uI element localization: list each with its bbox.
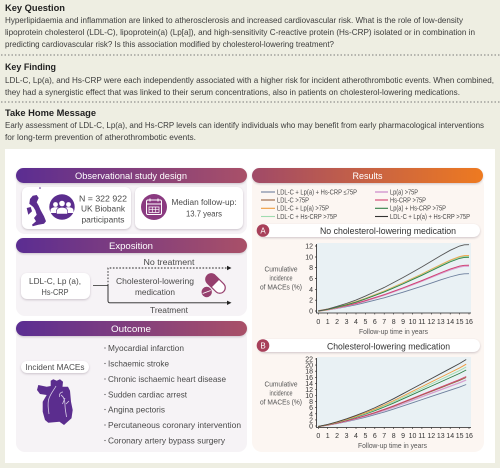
arrow: treatment <box>108 286 232 315</box>
legend <box>261 189 470 221</box>
text block: key question: predicting cardiovascular risk? Is this association modified by cholesterol-lowering treatment? <box>5 39 334 49</box>
text: participants: N = 322 922 <box>79 194 127 204</box>
chart B: cumulative incidence: 4 <box>354 433 358 440</box>
chart B: cumulative incidence: Follow-up time in years <box>358 441 427 450</box>
heading: B cholesterol-lowering medication: Cholesterol-lowering medication <box>327 342 450 352</box>
text: median follow-up: 13.7 years <box>186 208 222 218</box>
chart B: cumulative incidence: 14 <box>305 381 313 388</box>
y axis label B: Cumulative <box>264 380 298 388</box>
list: MACE outcomes <box>104 343 241 446</box>
chart B: cumulative incidence: 11 <box>418 433 426 440</box>
legend: Lp(a) + Hs-CRP >75P <box>390 206 446 213</box>
list: MACE outcomes: Sudden cardiac arrest <box>108 390 188 400</box>
chart A: cumulative incidence: 4 <box>354 319 358 326</box>
chart A: cumulative incidence: 11 <box>418 319 426 326</box>
text: median follow-up: Median follow-up: <box>172 197 236 207</box>
legend: LDL-C >75P <box>277 198 309 204</box>
arrow: no treatment: No treatment <box>144 257 195 267</box>
icon: UK map <box>27 187 46 226</box>
chart A: cumulative incidence: 0 <box>309 308 313 316</box>
chart B: cumulative incidence: 3 <box>345 433 349 440</box>
chart A: cumulative incidence: 12 <box>427 319 435 326</box>
card: median follow-up <box>135 187 243 229</box>
heading: B cholesterol-lowering medication: B <box>260 341 266 350</box>
legend: LDL-C + Lp(a) + Hs-CRP >75P <box>390 214 470 221</box>
text: median follow-up <box>172 197 236 218</box>
text block: key question <box>5 3 475 49</box>
text: participants <box>79 194 127 224</box>
chart B: cumulative incidence: 1 <box>326 433 330 440</box>
list: MACE outcomes: Chronic ischaemic heart disease <box>108 374 226 384</box>
panel: observational study design <box>16 168 247 234</box>
text: cholesterol-lowering medication <box>116 276 194 297</box>
chart A: cumulative incidence: 13 <box>437 319 445 326</box>
chart B: cumulative incidence: 8 <box>309 399 313 406</box>
heading: observational study design <box>16 168 247 183</box>
heading: A no cholesterol-lowering medication: No cholesterol-lowering medication <box>320 226 456 236</box>
chart A: cumulative incidence: 7 <box>382 319 386 326</box>
chart A: cumulative incidence: 5 <box>363 319 367 326</box>
chart B: cumulative incidence: 6 <box>309 405 313 412</box>
chart B: cumulative incidence: 6 <box>373 433 377 440</box>
y axis label A: of MACEs (%) <box>260 282 302 292</box>
legend: Lp(a) >75P <box>390 189 418 196</box>
chart B: cumulative incidence: 2 <box>335 433 339 440</box>
chart B: cumulative incidence: 7 <box>382 433 386 440</box>
heading: results: Results <box>352 170 383 181</box>
text: cholesterol-lowering medication: Cholesterol-lowering <box>116 276 194 286</box>
text: participants: UK Biobank <box>81 204 126 214</box>
chart B: cumulative incidence: 2 <box>309 417 313 424</box>
panel: outcome <box>16 321 247 452</box>
heading: B cholesterol-lowering medication <box>257 339 480 352</box>
heading: A no cholesterol-lowering medication: A <box>260 226 266 235</box>
text block: key finding: they had a synergistic effect that was linked to their serum concentrations, also in patients on cholesterol-lowering medications. <box>5 87 460 97</box>
text block: key question: Hyperlipidaemia and inflammation are linked to atherosclerosis and increased cardiovascular risk. What is the role of low-density <box>5 15 464 25</box>
chart A: cumulative incidence: 2 <box>335 319 339 326</box>
chart A: cumulative incidence: 1 <box>326 319 330 326</box>
icon: heart <box>37 379 73 425</box>
chart B: cumulative incidence: 10 <box>409 433 416 440</box>
text block: key question: lipoprotein cholesterol (LDL-C), lipoprotein(a) (Lp[a]), and high-sensitivity C-reactive protein (Hs-CRP) isolated or in combination in <box>5 27 475 37</box>
heading: observational study design: Observational study design <box>75 170 187 181</box>
box: biomarkers <box>21 273 90 299</box>
icon: pills <box>202 271 228 297</box>
y axis label B: incidence <box>270 388 292 398</box>
chart A: cumulative incidence: 8 <box>392 319 396 326</box>
text block: key finding: Key Finding <box>5 62 56 72</box>
text: cholesterol-lowering medication: medication <box>135 287 175 297</box>
panel: exposition <box>16 238 247 316</box>
chart A: cumulative incidence: 10 <box>409 319 416 326</box>
y axis label A: incidence <box>270 274 292 282</box>
chart A: cumulative incidence: 2 <box>309 298 313 305</box>
chart A: cumulative incidence: 6 <box>373 319 377 326</box>
chart A: cumulative incidence: 10 <box>305 254 313 262</box>
chart B: cumulative incidence: 9 <box>401 433 405 440</box>
label: incident MACEs: Incident MACEs <box>26 362 84 372</box>
heading: results <box>252 168 483 183</box>
icon: people <box>49 194 75 220</box>
chart B: cumulative incidence: 15 <box>456 433 464 440</box>
list: MACE outcomes: Angina pectoris <box>108 404 165 414</box>
chart B: cumulative incidence: 4 <box>309 411 313 418</box>
chart B: cumulative incidence: 14 <box>446 433 454 440</box>
text block: take home message: for long-term prevention of atherothrombotic events. <box>5 132 196 142</box>
chart A: cumulative incidence: 4 <box>309 287 313 294</box>
list: MACE outcomes: Ischaemic stroke <box>108 358 169 368</box>
chart B: cumulative incidence: 8 <box>392 433 396 440</box>
chart B: cumulative incidence: 5 <box>363 433 367 440</box>
chart B: cumulative incidence: 13 <box>437 433 445 440</box>
chart B: cumulative incidence: 0 <box>309 424 313 430</box>
chart B: cumulative incidence: 20 <box>305 363 313 370</box>
list: MACE outcomes: Coronary artery bypass surgery <box>108 436 226 446</box>
chart B: cumulative incidence: 16 <box>305 375 313 382</box>
text block: key question: Key Question <box>5 3 65 13</box>
y axis label A: Cumulative <box>264 264 298 274</box>
arrow: no treatment <box>93 257 232 286</box>
text block: key finding <box>5 62 494 97</box>
chart A: cumulative incidence: Follow-up time in years <box>359 327 428 336</box>
card: participants <box>22 187 131 229</box>
chart B: cumulative incidence <box>260 356 473 450</box>
legend: Hs-CRP >75P <box>390 198 426 204</box>
heading: exposition: Exposition <box>109 240 153 251</box>
chart B: cumulative incidence: 12 <box>427 433 435 440</box>
chart A: cumulative incidence: 9 <box>401 319 405 326</box>
box: biomarkers: LDL-C, Lp (a), <box>29 276 81 286</box>
chart A: cumulative incidence: 0 <box>316 319 320 326</box>
chart A: cumulative incidence: 15 <box>456 319 464 326</box>
chart A: cumulative incidence: 3 <box>345 319 349 326</box>
legend: LDL-C + Lp(a) >75P <box>277 206 329 213</box>
chart A: cumulative incidence <box>260 243 473 336</box>
heading: A no cholesterol-lowering medication <box>257 224 480 237</box>
arrow: treatment: Treatment <box>150 305 189 315</box>
legend: LDL-C + Lp(a) + Hs-CRP ≤75P <box>277 189 357 196</box>
list: MACE outcomes: Percutaneous coronary intervention <box>108 420 241 430</box>
chart A: cumulative incidence: 6 <box>309 276 313 283</box>
text block: take home message: Take Home Message <box>5 108 96 118</box>
chart A: cumulative incidence: 16 <box>465 319 473 326</box>
box: biomarkers: Hs-CRP <box>42 287 69 297</box>
legend: LDL-C + Hs-CRP >75P <box>277 214 337 221</box>
chart B: cumulative incidence: 18 <box>305 369 313 376</box>
text: participants: participants <box>82 214 124 224</box>
icon: calendar <box>141 194 167 220</box>
text block: take home message <box>5 108 484 142</box>
heading: exposition <box>16 238 247 253</box>
list: MACE outcomes: Myocardial infarction <box>108 343 184 353</box>
heading: outcome <box>16 321 247 336</box>
y axis label A <box>260 264 302 292</box>
heading: outcome: Outcome <box>111 323 151 334</box>
chart B: cumulative incidence: 22 <box>305 356 313 364</box>
chart A: cumulative incidence: 12 <box>305 244 313 250</box>
chart B: cumulative incidence: 12 <box>305 387 313 394</box>
y axis label B: of MACEs (%) <box>260 398 302 406</box>
chart A: cumulative incidence: 14 <box>446 319 454 326</box>
panel: white figure background <box>5 149 495 463</box>
chart A: cumulative incidence: 8 <box>309 265 313 272</box>
chart B: cumulative incidence: 16 <box>465 433 473 440</box>
chart B: cumulative incidence: 0 <box>316 433 320 440</box>
panel: results <box>252 168 484 452</box>
chart B: cumulative incidence: 10 <box>305 393 313 400</box>
y axis label B <box>260 380 302 406</box>
